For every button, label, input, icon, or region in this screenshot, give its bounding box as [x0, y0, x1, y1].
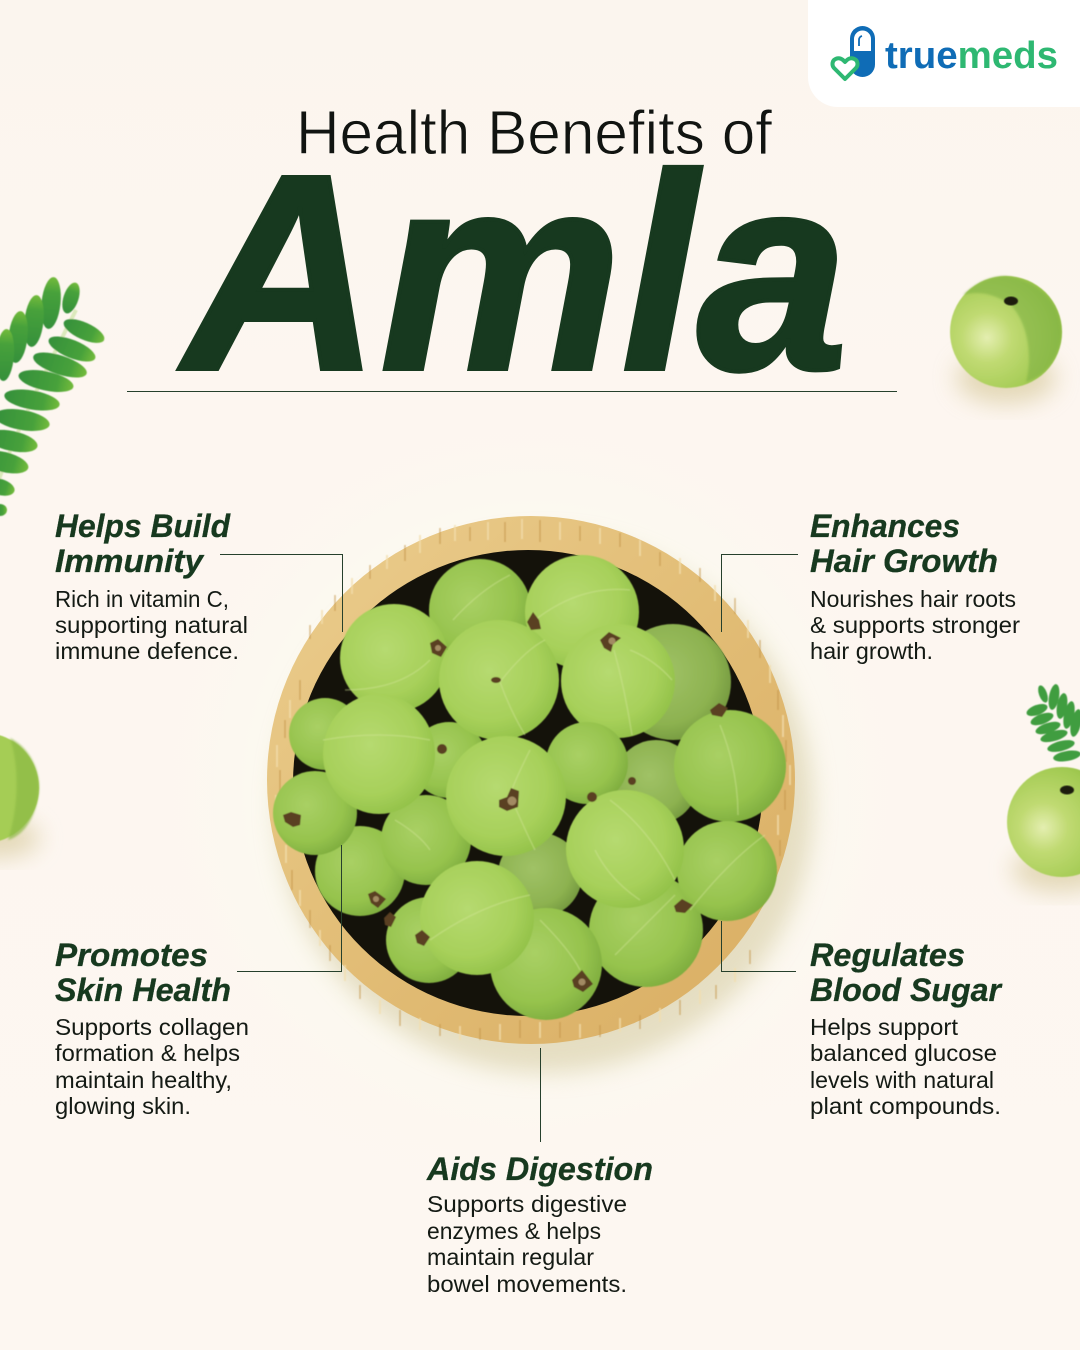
benefit: helps build immunity: immune defence.	[55, 638, 239, 664]
benefit: promotes skin health	[55, 937, 249, 1119]
benefit: promotes skin health: Promotes	[55, 937, 208, 973]
benefit: regulates blood sugar: plant compounds.	[810, 1093, 1001, 1119]
connector: immunity	[220, 554, 342, 632]
logo wordmark: truemeds	[885, 35, 1058, 77]
benefit: regulates blood sugar	[810, 937, 1003, 1119]
benefit: aids digestion: maintain regular	[427, 1244, 594, 1270]
benefit: enhances hair growth: Hair Growth	[810, 543, 998, 579]
benefit: promotes skin health: glowing skin.	[55, 1093, 191, 1119]
connector: skin health	[237, 845, 342, 972]
benefit: promotes skin health: maintain healthy,	[55, 1067, 232, 1093]
connector: blood sugar	[722, 921, 796, 972]
title: Amla	[176, 117, 848, 429]
logo panel: truemeds	[808, 0, 1080, 107]
benefit: enhances hair growth	[810, 508, 1020, 664]
benefit: regulates blood sugar: balanced glucose	[810, 1040, 997, 1066]
benefit: helps build immunity: Rich in vitamin C,	[55, 586, 229, 612]
benefit: enhances hair growth: Nourishes hair roots	[810, 586, 1016, 612]
bowl of amla	[267, 516, 813, 1073]
fruit stems	[283, 612, 728, 992]
benefit: helps build immunity: supporting natural	[55, 612, 248, 638]
amla fruits	[273, 555, 786, 1020]
benefit: regulates blood sugar: Blood Sugar	[810, 972, 1003, 1008]
connector: digestion	[540, 1048, 542, 1142]
icon: heart	[832, 58, 858, 79]
benefit: regulates blood sugar: Regulates	[810, 937, 965, 973]
fruit: top right amla	[950, 276, 1062, 404]
benefit: aids digestion	[426, 1151, 653, 1297]
benefit: aids digestion: bowel movements.	[427, 1271, 627, 1297]
fruit: right edge amla	[1007, 767, 1080, 892]
leaf: top left	[0, 276, 108, 516]
benefit: helps build immunity: Helps Build	[55, 508, 231, 544]
benefit: aids digestion: enzymes & helps	[427, 1218, 601, 1244]
wooden bowl	[267, 516, 795, 1044]
benefit: aids digestion: Supports digestive	[427, 1191, 627, 1217]
icon: pill	[850, 26, 875, 77]
benefit: regulates blood sugar: Helps support	[810, 1014, 959, 1040]
benefit: enhances hair growth: & supports stronger	[810, 612, 1020, 638]
fruit: left edge amla	[0, 733, 40, 858]
title divider line	[127, 390, 897, 392]
fruit ribs	[323, 575, 765, 970]
benefit: promotes skin health: Supports collagen	[55, 1014, 249, 1040]
benefit: helps build immunity	[55, 508, 248, 664]
benefit: promotes skin health: Skin Health	[55, 972, 231, 1008]
benefit: promotes skin health: formation & helps	[55, 1040, 240, 1066]
title: Health Benefits of	[296, 99, 773, 168]
bowl shadow	[277, 537, 813, 1073]
benefit: enhances hair growth: hair growth.	[810, 638, 933, 664]
benefit: helps build immunity: Immunity	[55, 543, 205, 579]
benefit: aids digestion: Aids Digestion	[426, 1151, 653, 1187]
benefit: enhances hair growth: Enhances	[810, 508, 960, 544]
connector: hair growth	[722, 554, 798, 632]
benefit: regulates blood sugar: levels with natural	[810, 1067, 994, 1093]
leaf: right edge	[1025, 683, 1080, 763]
